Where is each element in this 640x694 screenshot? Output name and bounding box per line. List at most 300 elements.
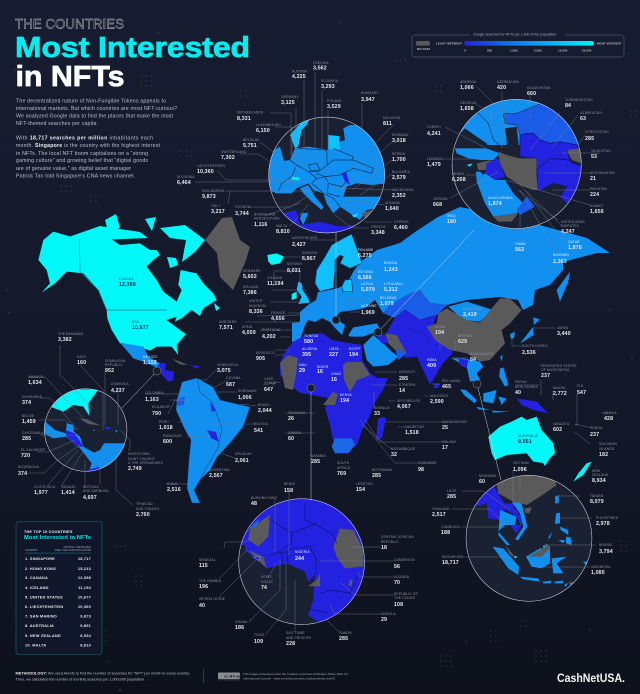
label: Myanmar: 60 <box>479 479 485 485</box>
label: Norway: NORWAY <box>287 262 303 266</box>
label: India: 409 <box>427 363 436 369</box>
label: Micronesia: OF MICRONESIA <box>541 368 570 372</box>
label: Sierra Leone: SIERRA LEONE <box>199 597 226 601</box>
label: Saint Vincent and the Grenadines <box>128 452 164 472</box>
label: Mongolia: 2,419 <box>463 312 477 318</box>
label: Cape Verde: CAPE <box>264 377 274 381</box>
label: Germany <box>281 95 299 106</box>
label: Mozambique: 32 <box>391 452 397 458</box>
label: Belgium: 5,751 <box>243 143 257 149</box>
label: Hungary: HUNGARY <box>361 91 379 95</box>
label: Haiti <box>77 355 86 366</box>
label: Malawi: 17 <box>442 445 448 451</box>
label: Saint Vincent and the Grenadines: 2,749 <box>128 466 142 472</box>
label: Belgium <box>243 138 259 149</box>
label: Jamaica <box>28 375 44 386</box>
label: Namibia: NAMIBIA <box>311 454 326 458</box>
label: Slovenia: 6,464 <box>177 180 191 186</box>
label: Kenya: 194 <box>340 398 349 404</box>
label: Sweden: 6,867 <box>302 256 316 262</box>
label: Benin: BENIN <box>284 482 295 486</box>
label: Cameroon: 56 <box>394 564 400 570</box>
table rows: 10,360 <box>78 604 91 609</box>
label: Albania: 1,640 <box>385 206 399 212</box>
label: Somalia <box>374 406 390 417</box>
label: Botswana: 285 <box>372 473 381 479</box>
label: Sweden <box>302 251 318 262</box>
label: Djibouti <box>399 370 415 382</box>
label: Central African Republic <box>381 535 414 551</box>
table column headers: PER 1 MILLION POPULATION <box>55 548 91 552</box>
zoom inset: Africa <box>238 498 365 625</box>
label: Greece: GREECE <box>371 225 387 229</box>
label: Samoa: SAMOA <box>604 411 617 415</box>
label: Belize: BELIZE <box>22 414 35 418</box>
label: Bosnia: HERZEGOVINA <box>254 216 280 220</box>
label: South Africa: AFRICA <box>337 466 351 470</box>
label: Indonesia: 1,085 <box>591 570 605 576</box>
label: Sweden: SWEDEN <box>302 251 318 255</box>
world map <box>38 207 610 503</box>
intro text: The decentralized nature of Non-Fungible Tokens appeals to <box>16 98 166 104</box>
label: Moldova <box>383 116 401 127</box>
label: Belarus <box>380 296 397 307</box>
label: San Marino: 9,873 <box>202 194 216 200</box>
label: Israel: ISRAEL <box>452 172 465 176</box>
label: Czechia: CZECHIA <box>313 61 329 65</box>
label: Azerbaijan: 420 <box>497 85 506 91</box>
label: Myanmar <box>479 474 497 485</box>
label: Sri Lanka: 465 <box>442 384 451 390</box>
label: Sao Tome and Principe <box>286 631 312 647</box>
label: Chad <box>331 372 341 383</box>
license text: This image is licensed under the Creative Commons Attribution-Share Alike 4.0 <box>243 672 348 676</box>
label: Brazil: 2,044 <box>258 408 272 414</box>
label: Solomon Islands: ISLANDS <box>599 447 615 451</box>
label: Ivory Coast <box>261 575 273 591</box>
label: Peru <box>159 420 173 431</box>
label: Macedonia: MACEDONIA <box>392 188 414 192</box>
label: Peru: PERU <box>159 420 169 424</box>
label: Tajikistan <box>591 149 611 160</box>
label: Nepal <box>435 325 446 336</box>
label: Mozambique <box>391 447 416 458</box>
label: Spain: SPAIN <box>242 325 253 329</box>
label: Kenya <box>340 393 352 404</box>
map labels: Europe <box>177 61 414 340</box>
label: South Africa: 769 <box>337 471 346 477</box>
label: Japan: 3,440 <box>557 331 571 337</box>
methodology <box>16 670 190 682</box>
label: Paraguay <box>163 434 183 445</box>
label: Serbia: SERBIA <box>392 152 406 156</box>
label: South Korea: 2,536 <box>522 350 536 356</box>
label: Singapore: 18,717 <box>442 560 459 566</box>
label: Mauritius: 1,518 <box>405 430 419 436</box>
label: Portugal <box>262 328 281 340</box>
table rows: 8,810 <box>80 642 91 647</box>
label: Togo: 109 <box>254 639 263 645</box>
label: Libya: LIBYA <box>329 347 340 351</box>
Mongolia <box>448 302 493 322</box>
label: San Marino: SAN MARINO <box>202 189 225 193</box>
label: Mali <box>299 363 307 374</box>
label: El Salvador: 720 <box>21 453 30 459</box>
label: Egypt: 194 <box>349 352 358 358</box>
label: Thailand: THAILAND <box>432 507 450 511</box>
table column headers <box>25 545 91 553</box>
label: Oman: OMAN <box>515 242 526 246</box>
table title: Most Interested in NFTs <box>24 535 91 541</box>
label: Kyrgyzstan: 285 <box>585 136 594 142</box>
label: Zimbabwe: 98 <box>418 467 424 473</box>
label: Sri Lanka <box>442 379 461 390</box>
label: Spain: 4,059 <box>242 330 256 336</box>
label: Israel: 6,268 <box>452 177 466 183</box>
label: Latvia <box>361 282 375 293</box>
label: UAE: 4,247 <box>561 229 575 235</box>
label: Argentina: ARGENTINA <box>209 468 230 472</box>
table rows: 12,358 <box>78 575 92 580</box>
label: Panama <box>61 485 76 496</box>
label: Bhutan <box>458 334 473 345</box>
creative commons badge: cc BY-SA <box>224 674 242 678</box>
map labels: Africa <box>199 334 468 647</box>
label: Italy <box>211 204 225 215</box>
legend <box>412 32 624 57</box>
label: Brunei <box>599 543 613 555</box>
Africa <box>280 333 388 453</box>
label: Costa Rica <box>34 485 56 496</box>
label: Guatemala: 285 <box>22 436 31 442</box>
label: Gabon: 285 <box>339 636 348 642</box>
label: Belgium: BELGIUM <box>243 138 259 142</box>
label: Switzerland: SWITZERLAND <box>221 150 247 154</box>
label: Vanuatu: 602 <box>553 427 562 433</box>
label: Italy: 3,217 <box>211 209 225 215</box>
label: Vietnam <box>513 461 529 473</box>
label: Angola <box>381 612 396 623</box>
label: Liechtenstein: LIECHTENSTEIN <box>197 164 226 168</box>
label: Solomon Islands: SOLOMON <box>599 442 617 446</box>
label: Antigua and Barbuda: 4,697 <box>83 495 97 501</box>
label: Ghana <box>235 620 248 631</box>
label: Dominica: DOMINICA <box>111 382 129 386</box>
label: Honduras <box>22 395 43 406</box>
label: Djibouti: 285 <box>399 376 408 382</box>
label: Nepal: 194 <box>435 330 444 336</box>
label: Croatia <box>235 205 251 217</box>
intro text: gaming culture” and growing belief that “digital goods <box>16 158 148 164</box>
label: Burkina Faso <box>251 496 277 507</box>
Asia islands <box>435 272 570 463</box>
label: Switzerland <box>221 150 247 161</box>
label: South Korea <box>522 344 548 356</box>
label: Senegal: 115 <box>199 563 208 569</box>
label: Oman: 562 <box>515 247 524 253</box>
label: Honduras: HONDURAS <box>22 395 43 399</box>
label: Greece <box>371 225 387 236</box>
label: Cape Verde: 647 <box>264 387 273 393</box>
label: Uruguay: 2,061 <box>235 458 249 464</box>
label: Croatia: 3,744 <box>235 211 249 217</box>
title: in NFTs <box>16 61 124 93</box>
zoom inset: Caribbean <box>43 388 128 475</box>
label: Moldova: MOLDOVA <box>383 116 401 120</box>
label: Romania <box>392 133 409 144</box>
label: Senegal <box>199 558 216 569</box>
label: Luxembourg: LUXEMBOURG <box>256 123 281 127</box>
label: Belize: 1,459 <box>22 419 36 425</box>
label: Luxembourg: 6,150 <box>256 128 270 134</box>
label: Kuwait: KUWAIT <box>590 204 604 208</box>
label: Tanzania: 26 <box>288 416 294 422</box>
label: Sri Lanka: SRI LANKA <box>442 379 461 383</box>
label: Guyana <box>226 376 241 388</box>
label: Brunei: 3,794 <box>599 549 613 555</box>
label: Thailand: 2,517 <box>432 512 446 518</box>
label: Montenegro: MONTENEGRO <box>292 236 318 240</box>
label: Malawi <box>442 440 456 451</box>
table column headers: MONTHLY SEARCHES <box>64 545 91 549</box>
label: Seychelles: 4,067 <box>397 404 411 410</box>
label: UAE: UNITED ARAB <box>561 220 585 224</box>
label: Ghana: 186 <box>235 625 244 631</box>
label: Bahrain <box>553 253 569 265</box>
label: Tanzania: TANZANIA <box>288 411 306 415</box>
label: New Zealand <box>592 469 609 484</box>
label: Nauru <box>553 386 567 397</box>
label: Saudi Arabia: 1,874 <box>488 201 502 207</box>
label: USA: 10,677 <box>132 325 149 331</box>
label: Canada: 12,358 <box>119 282 136 288</box>
label: Denmark <box>243 269 261 280</box>
Greenland <box>205 217 250 290</box>
table rows: 15,213 <box>78 566 92 571</box>
label: Taiwan: 8,079 <box>590 499 604 505</box>
label: Serbia <box>392 152 406 163</box>
label: Kazakhstan: 660 <box>527 91 536 97</box>
label: Angola: ANGOLA <box>381 612 396 616</box>
label: Bosnia: BOSNIA AND <box>254 212 276 216</box>
label: Republic of the Congo: THE CONGO <box>394 596 416 600</box>
label: Republic of the Congo: REPUBLIC OF <box>394 592 418 596</box>
label: Georgia: GEORGIA <box>460 101 477 105</box>
label: Mali: MALI <box>299 363 307 367</box>
label: Iraq: 180 <box>447 219 456 225</box>
Eurasia light blue <box>292 207 610 342</box>
Canada and USA <box>38 214 220 355</box>
label: Haiti: HAITI <box>77 355 86 359</box>
label: Iceland: ICELAND <box>267 276 283 280</box>
label: Senegal: SENEGAL <box>199 558 216 562</box>
label: New Zealand: 8,934 <box>592 478 606 484</box>
label: Kyrgyzstan: KYRGYZSTAN <box>585 130 609 134</box>
label: Antigua and Barbuda: ANTIGUA <box>83 485 99 489</box>
label: Suriname: 1,006 <box>238 395 252 401</box>
label: The Gambia: 196 <box>199 584 208 590</box>
label: Lebanon: 1,479 <box>427 162 441 168</box>
label: Burkina Faso: 48 <box>251 501 257 507</box>
label: Liechtenstein <box>197 164 226 175</box>
label: Ireland: 7,386 <box>243 290 257 296</box>
label: Lithuania: 5,312 <box>384 287 398 293</box>
label: Finland: FINLAND <box>358 248 374 252</box>
intro text: month. Singapore is the country with the highest interest <box>16 143 161 149</box>
label: Burkina Faso: BURKINA FASO <box>251 496 277 500</box>
label: Guyana: 687 <box>226 382 235 388</box>
label: Tunisia <box>304 334 319 345</box>
table rows: 8. AUSTRALIA <box>25 623 54 628</box>
label: Lebanon <box>427 157 444 168</box>
label: USA: USA <box>132 320 140 324</box>
intro text: international markets. But which countries are most NFT-curious? <box>16 106 177 112</box>
label: Afghanistan: 21 <box>590 176 596 182</box>
label: Bulgaria <box>392 170 411 181</box>
label: Uzbekistan: UZBEKISTAN <box>580 111 603 115</box>
label: Dominica <box>111 382 129 394</box>
label: Spain <box>242 325 256 336</box>
label: USA <box>132 320 149 331</box>
label: Dominican Republic: DOMINICAN <box>105 359 126 363</box>
label: Russia <box>384 261 398 273</box>
table rows: 10. MALTA <box>25 642 46 647</box>
label: Bolivia: 541 <box>254 428 263 434</box>
label: Central African Republic: 18 <box>381 545 387 551</box>
label: Laos <box>447 489 457 500</box>
label: Republic of the Congo <box>394 592 418 608</box>
label: Uzbekistan <box>580 111 603 122</box>
label: Micronesia <box>541 364 577 379</box>
label: Montenegro: 2,427 <box>292 242 306 248</box>
label: Lesotho: LESOTHO <box>356 482 373 486</box>
table rows: 2. HONG KONG <box>25 566 56 571</box>
label: Vanuatu: VANUATU <box>553 422 570 426</box>
label: Lebanon: LEBANON <box>427 157 444 161</box>
label: Serbia: 1,700 <box>392 157 406 163</box>
label: Uruguay: URUGUAY <box>235 452 253 456</box>
label: Japan: JAPAN <box>557 326 569 330</box>
label: Macedonia <box>392 188 414 199</box>
New Zealand <box>573 462 592 482</box>
label: Italy: ITALY <box>211 204 221 208</box>
label: Morocco: 905 <box>256 356 265 362</box>
label: Singapore: SINGAPORE <box>442 555 464 559</box>
label: Ukraine: 1,969 <box>361 310 375 316</box>
label: Botswana <box>372 468 393 479</box>
label: Maldives: MALDIVES <box>430 394 449 398</box>
label: Netherlands: NETHERLANDS <box>237 110 264 114</box>
Turkey and Caucasus <box>348 323 381 337</box>
label: Romania: ROMANIA <box>392 133 409 137</box>
Singapore highlight <box>514 556 516 558</box>
legend: LEAST INTEREST <box>436 42 462 46</box>
label: Estonia <box>358 270 374 281</box>
label: Mali: 29 <box>299 368 305 374</box>
label: Turkmenistan <box>565 98 593 109</box>
label: Guatemala <box>22 431 44 442</box>
label: Belarus: 1,079 <box>380 301 394 307</box>
label: Slovakia <box>321 79 339 90</box>
label: Austria <box>292 69 308 80</box>
label: New Zealand: NEW <box>592 469 601 473</box>
intro text: in NFTs. The local NFT boom capitalizes on a “strong <box>16 151 148 157</box>
label: Suriname: SURINAME <box>238 389 257 393</box>
label: Ukraine <box>361 304 377 316</box>
label: Fiji: 547 <box>577 390 586 396</box>
label: Uganda <box>394 575 410 586</box>
label: Egypt: EGYPT <box>349 347 361 351</box>
label: Austria: 4,225 <box>292 74 306 80</box>
label: Morocco: MOROCCO <box>256 351 275 355</box>
label: Uzbekistan: 63 <box>580 116 586 122</box>
label: Samoa: 428 <box>604 416 613 422</box>
label: Papua New Guinea: 40 <box>515 390 521 396</box>
label: Uganda: 70 <box>394 580 400 586</box>
label: Papua New Guinea <box>515 380 538 396</box>
label: Trinidad and Tobago: 2,760 <box>136 512 150 518</box>
panel: top 10 countries table <box>16 522 102 654</box>
label: Qatar: QATAR <box>568 240 580 244</box>
label: The Gambia: THE GAMBIA <box>199 579 222 583</box>
label: Lithuania <box>384 282 403 293</box>
label: Bhutan: BHUTAN <box>458 334 473 338</box>
label: India: INDIA <box>427 358 437 362</box>
label: Guyana: GUYANA <box>226 376 241 380</box>
label: Venezuela: VENEZUELA <box>217 363 239 367</box>
legend: MOST INTEREST <box>597 42 622 46</box>
Australia <box>488 417 555 463</box>
label: Malta <box>276 224 290 235</box>
label: Namibia <box>311 454 326 465</box>
label: Andorra: 7,571 <box>219 325 233 331</box>
label: Cape Verde: VERDE <box>264 381 277 385</box>
label: Nigeria: NIGERIA <box>295 550 310 554</box>
label: Nigeria <box>295 550 310 562</box>
label: Zambia: ZAMBIA <box>288 431 302 435</box>
label: Philippines <box>596 516 619 527</box>
label: Iceland: 11,194 <box>267 281 284 287</box>
label: Latvia: 5,079 <box>361 287 375 293</box>
label: Turkey: TURKEY <box>427 125 442 129</box>
label: Madagascar <box>442 420 468 431</box>
intro text: NFT-themed searches per capita. <box>16 121 98 127</box>
label: Uganda: UGANDA <box>394 575 410 579</box>
label: Qatar: 1,878 <box>568 245 582 251</box>
label: Honduras: 374 <box>22 400 31 406</box>
label: Angola: 29 <box>381 617 387 623</box>
label: Chile: 2,516 <box>167 487 181 493</box>
label: Somalia: 33 <box>374 411 380 417</box>
map labels: Asia and Oceania <box>427 307 619 576</box>
label: Malta: MALTA <box>276 224 288 228</box>
label: Mozambique: MOZAMBIQUE <box>391 447 416 451</box>
label: Iraq: IRAQ <box>447 214 456 218</box>
label: Nicaragua <box>18 465 40 477</box>
label: Seychelles: SEYCHELLES <box>397 399 421 403</box>
legend: 1,000 <box>510 48 518 52</box>
label: Armenia: 1,066 <box>460 85 474 91</box>
label: Czechia: 3,562 <box>313 66 327 72</box>
label: Turkmenistan: TURKMENISTAN <box>565 98 593 102</box>
label: Micronesia: FEDERATED STATES <box>541 364 577 368</box>
inset connector lines and anchor dots <box>122 230 501 500</box>
label: Tonga <box>590 426 603 438</box>
label: Ethiopia <box>399 383 416 394</box>
label: Pakistan <box>590 187 608 198</box>
label: Belize <box>22 414 36 425</box>
label: Armenia <box>460 80 477 91</box>
